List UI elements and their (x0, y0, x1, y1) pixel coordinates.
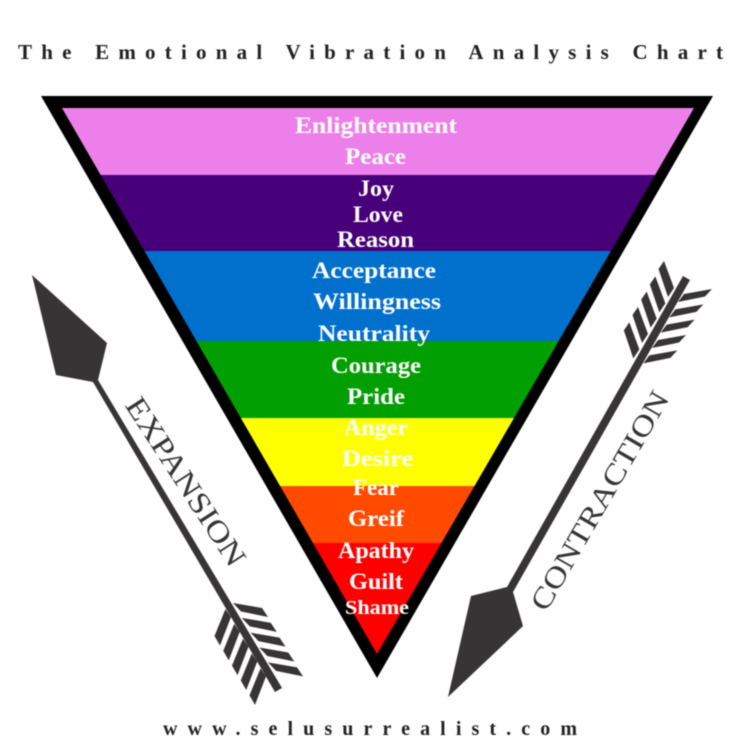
emotion labels: Guilt (349, 569, 403, 594)
arrow: contraction (pointing down-left) (448, 261, 712, 697)
emotion labels: Peace (345, 144, 406, 169)
emotion labels: Love (353, 202, 403, 227)
website footer: www.selusurrealist.com (163, 718, 577, 740)
emotion labels: Acceptance (312, 258, 436, 283)
emotion labels: Neutrality (318, 321, 431, 346)
emotion labels: Anger (344, 415, 408, 440)
colour bands (40, 108, 720, 655)
title: The Emotional Vibration Analysis Chart (18, 40, 723, 64)
emotion labels: Shame (345, 597, 409, 619)
emotion labels: Apathy (338, 538, 415, 563)
emotion labels: Enlightenment (295, 113, 457, 138)
emotion labels: Desire (342, 446, 413, 471)
emotion labels: Willingness (313, 289, 441, 314)
emotion labels: Greif (348, 506, 404, 531)
emotion labels: Fear (353, 475, 399, 500)
label: expansion: EXPANSION (119, 391, 252, 573)
emotion labels: Reason (337, 227, 414, 252)
emotion labels: Pride (347, 384, 405, 409)
emotion labels: Courage (331, 353, 421, 378)
pyramid black frame (41, 96, 713, 678)
label: contraction: CONTRACTION (524, 386, 676, 616)
emotion labels (295, 113, 457, 619)
inverted pyramid chart (40, 96, 720, 678)
arrow: expansion (pointing up-left) (32, 275, 303, 705)
emotion labels: Joy (358, 176, 395, 201)
